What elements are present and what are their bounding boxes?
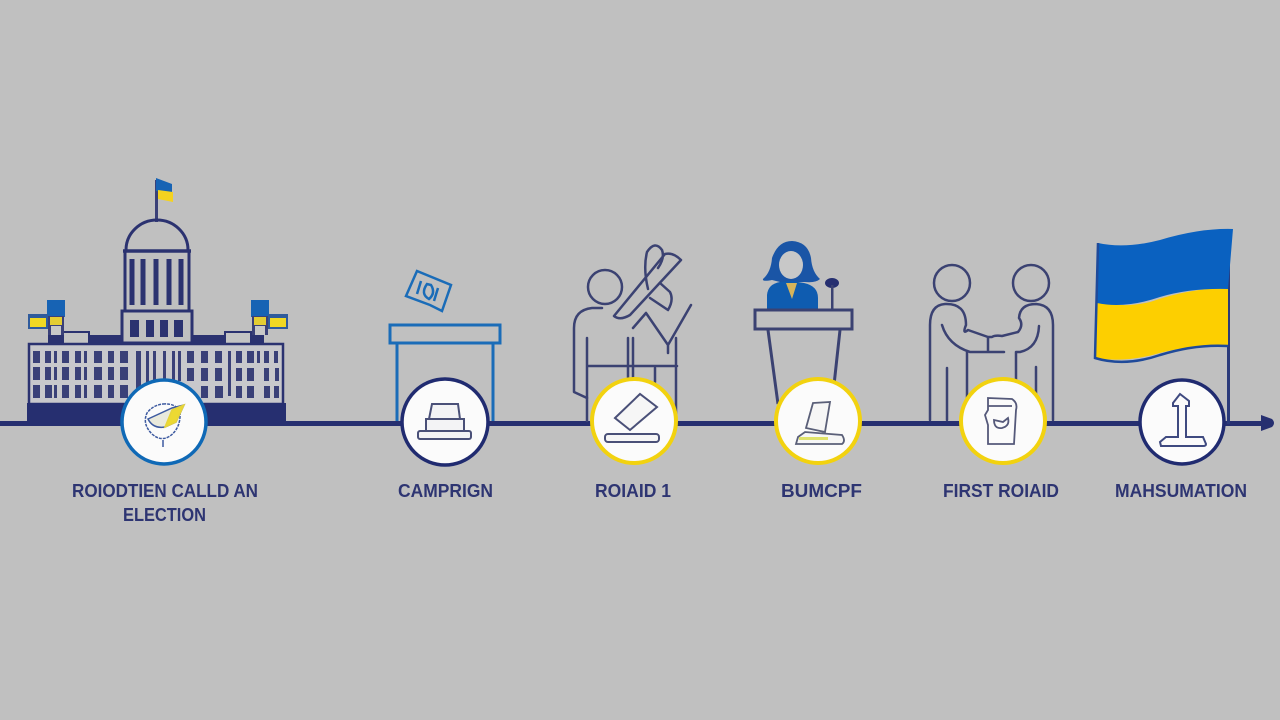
label: step 1: ELECTION [123, 505, 206, 525]
main wing [29, 344, 283, 404]
illustration: Ukrainian flag [1095, 229, 1233, 424]
timeline arrow [0, 415, 1274, 431]
label: step 5: FIRST ROIAID [943, 481, 1059, 501]
speaker hair [763, 241, 820, 282]
label: step 1: ROIODTIEN CALLD AN [72, 481, 258, 501]
step marker 2 [402, 379, 488, 465]
box sides [397, 344, 493, 421]
illustration: speaker at podium [755, 241, 852, 404]
step marker 3 [592, 379, 676, 463]
flag blue band [1097, 229, 1233, 305]
label: step 3: ROIAID 1 [595, 481, 671, 501]
roof [48, 332, 264, 344]
illustration: two voters [574, 245, 691, 421]
illustration: ballot box [390, 271, 500, 421]
speaker collar [786, 283, 797, 299]
flag outline [1095, 243, 1228, 362]
label: step 1 [72, 481, 258, 525]
icon: stacked blocks [418, 404, 471, 439]
speaker face [779, 251, 803, 279]
box lid [390, 325, 500, 343]
label: step 2: CAMPRIGN [398, 481, 493, 501]
icon: podium arrow [1160, 394, 1206, 446]
base [27, 403, 286, 425]
flag pole [1227, 232, 1230, 424]
illustration: parliament building [27, 178, 288, 425]
icon: rosette ballot [145, 404, 184, 447]
label: step 6: MAHSUMATION [1115, 481, 1247, 501]
speaker body [767, 281, 818, 310]
icon: ballot and slot [605, 394, 659, 442]
lower block windows [130, 320, 183, 337]
icon: ballot on base [796, 402, 844, 444]
step marker 4 [776, 379, 860, 463]
label: step 4: BUMCPF [781, 481, 862, 501]
icon: dome flag [155, 178, 173, 222]
dome and drum [122, 220, 192, 343]
ballot paper [406, 271, 451, 311]
icon: left flags [28, 300, 65, 335]
windows [33, 351, 279, 398]
step marker 1 [122, 380, 206, 464]
microphone [825, 278, 839, 310]
illustration: handshake [930, 265, 1053, 420]
icon: portrait document [985, 398, 1016, 444]
flag yellow band [1096, 288, 1228, 360]
step marker 6 [1140, 380, 1224, 464]
step marker 5 [961, 379, 1045, 463]
icon: right flags [251, 300, 288, 335]
podium [755, 310, 852, 404]
